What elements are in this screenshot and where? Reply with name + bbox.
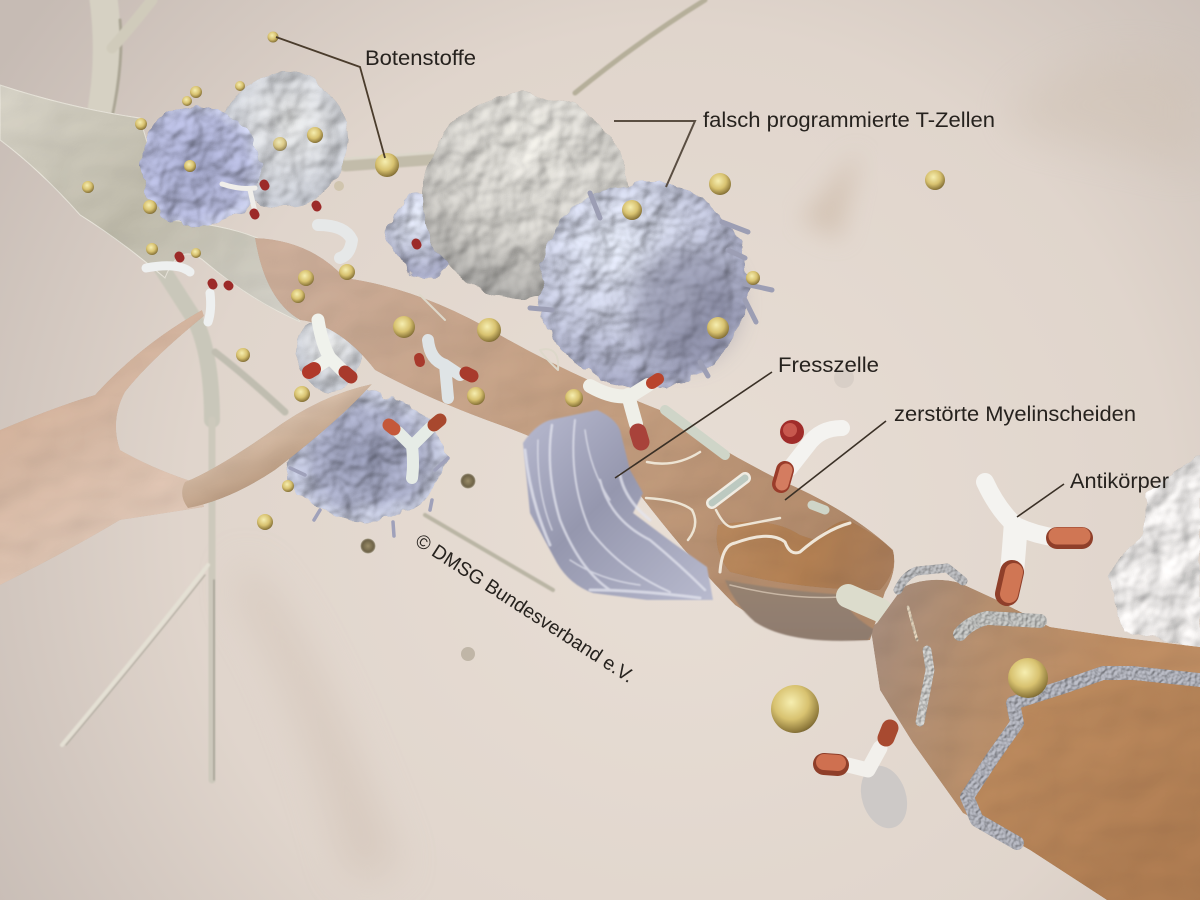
neuron left body with processes [0,310,372,585]
label: zerstörte Myelinscheiden with leader line: zerstörte Myelinscheiden [894,403,1136,426]
myelin damage, lower axon [898,568,1200,843]
label: Antikörper with leader line: Antikörper [1070,470,1169,493]
label: Antikörper with leader line [1017,470,1169,517]
myelin damage, upper axon [420,295,850,598]
antibody: bottom [824,728,915,834]
background nerve fibres [62,0,705,780]
label: Fresszelle with leader line: Fresszelle [778,354,879,377]
cell: white T cell top left [220,72,348,208]
cell: blue T cell lower [288,394,448,536]
antibody: near lower axon [309,320,351,377]
phagocyte [523,410,713,600]
copyright: © DMSG Bundesverband e.V. [411,530,638,688]
cell: white T cell at right edge [1107,455,1200,650]
axon lower right [872,580,1200,900]
axon end, upper tip [716,520,894,590]
antibody: under large blue cell [590,379,658,442]
label: Botenstoffe with leader lines [276,37,476,158]
label: zerstörte Myelinscheiden with leader line [785,403,1136,500]
glial cell, top left [0,85,300,322]
cell: large white T cell [422,94,628,300]
cell: large blue T cell [530,181,772,389]
small cell behind axon [389,191,461,279]
messenger substances (gold spheres) [82,32,1048,733]
label: Botenstoffe with leader lines: Botenstoffe [365,47,476,70]
antibody: right, large [985,482,1082,594]
axon end, lower lobe [725,580,875,641]
cell: blue T cell top left [140,107,260,227]
exposed axon core [848,596,880,610]
label: Fresszelle with leader line [615,354,879,478]
label: falsch programmierte T-Zellen with leader lines: falsch programmierte T-Zellen [703,109,995,132]
axon upper [255,238,894,640]
antibody: centre right [780,420,842,484]
antibody: centre axon [419,340,472,398]
antibodies: top left cluster [146,184,417,322]
small cell lower axon [296,317,360,393]
label: falsch programmierte T-Zellen with leader lines [614,109,995,187]
antibody: on lower blue cell [389,420,440,478]
